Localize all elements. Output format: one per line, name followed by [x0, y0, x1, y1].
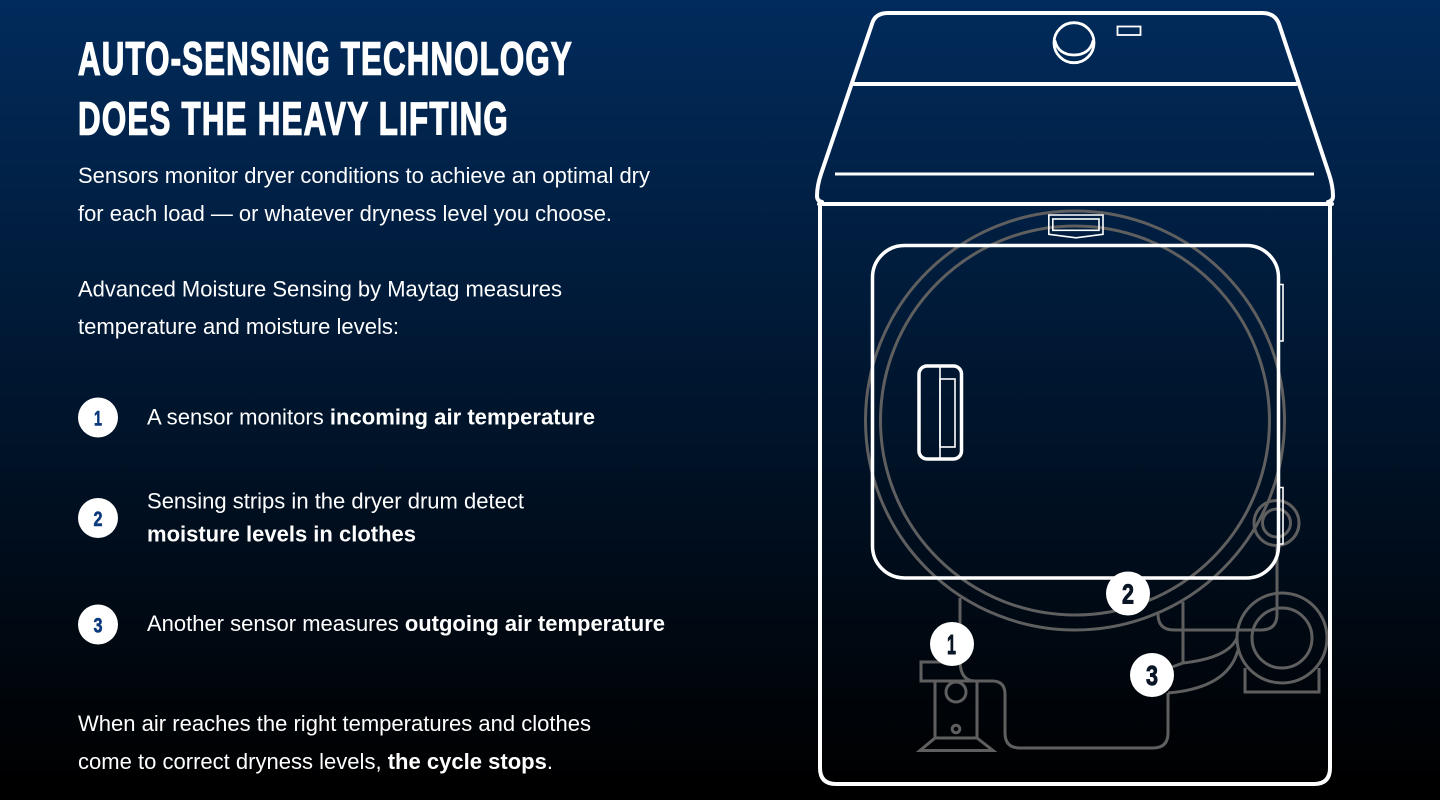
title: AUTO-SENSING TECHNOLOGY — [78, 34, 572, 85]
lint filter — [1049, 215, 1103, 238]
marker 1: 1 — [947, 629, 956, 660]
step 1 — [78, 398, 595, 438]
door hinges — [1279, 284, 1283, 544]
dryer cabinet — [820, 204, 1330, 784]
step 1: A sensor monitors incoming air temperature — [147, 404, 595, 430]
step 2: 2 — [94, 508, 102, 531]
step 1: 1 — [94, 408, 102, 430]
title: DOES THE HEAVY LIFTING — [78, 94, 508, 145]
control knob — [1054, 23, 1094, 63]
door handle — [919, 366, 962, 459]
closing paragraph — [78, 711, 591, 774]
intro paragraph — [78, 163, 650, 226]
drum — [866, 211, 1284, 630]
marker 3 — [1130, 653, 1174, 697]
moisture sensing paragraph: temperature and moisture levels: — [78, 314, 399, 339]
marker 3: 3 — [1146, 660, 1158, 691]
indicator light — [1118, 26, 1140, 35]
marker 1 — [930, 622, 974, 666]
moisture sensing paragraph — [78, 276, 562, 339]
step 2: Sensing strips in the dryer drum detect — [147, 488, 524, 514]
grey mechanical parts — [920, 500, 1327, 750]
step 3: 3 — [94, 614, 102, 638]
intro paragraph: Sensors monitor dryer conditions to achieve an optimal dry — [78, 163, 650, 188]
dryer illustration — [817, 13, 1333, 784]
step 2 — [78, 488, 524, 546]
closing paragraph: When air reaches the right temperatures and clothes — [78, 711, 591, 736]
moisture sensing paragraph: Advanced Moisture Sensing by Maytag measures — [78, 276, 562, 302]
door — [872, 246, 1278, 578]
title — [78, 34, 572, 145]
step 3 — [78, 604, 665, 644]
closing paragraph: come to correct dryness levels, the cycle stops. — [78, 749, 553, 774]
step 3: Another sensor measures outgoing air temperature — [147, 611, 665, 636]
dryer lid and control panel — [817, 13, 1333, 204]
intro paragraph: for each load — or whatever dryness level you choose. — [78, 201, 612, 226]
lid line — [835, 172, 1314, 176]
marker 2 — [1106, 572, 1150, 616]
step 2: moisture levels in clothes — [147, 522, 416, 546]
marker 2: 2 — [1122, 578, 1134, 610]
